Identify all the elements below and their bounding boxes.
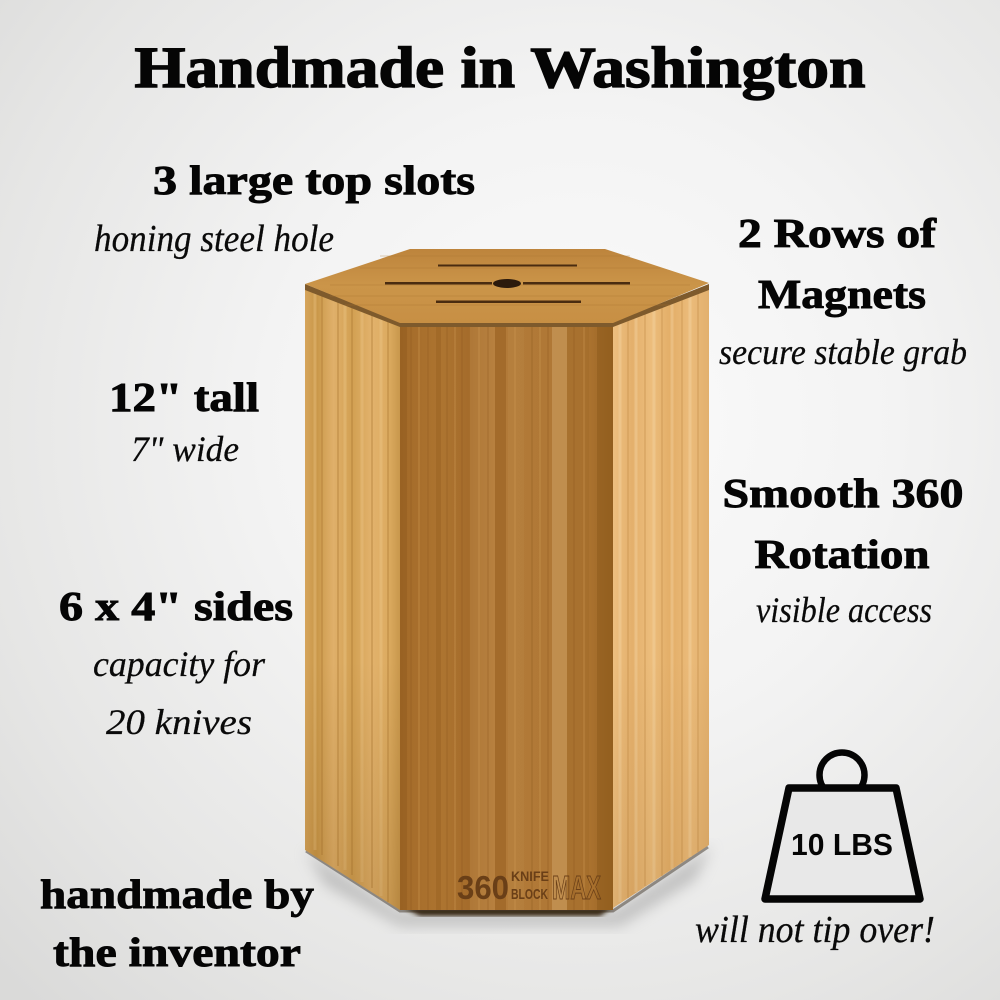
- engraved logo: [457, 868, 601, 906]
- feature: handmade by the inventor: [40, 871, 315, 975]
- feature: handmade by the inventor: handmade by: [40, 871, 315, 917]
- engraved logo: 360: [457, 869, 509, 906]
- feature: rotation: visible access: [756, 590, 932, 630]
- feature: magnets: Magnets: [758, 271, 926, 317]
- center face: [400, 326, 613, 910]
- feature: sides and capacity: 20 knives: [106, 702, 252, 742]
- engraved logo: MAX: [552, 869, 601, 906]
- feature: height and width: [109, 374, 259, 469]
- feature: rotation: Smooth 360: [722, 470, 964, 516]
- feature: height and width: 12" tall: [109, 374, 259, 420]
- feature: handmade by the inventor: the inventor: [53, 929, 301, 975]
- feature: sides and capacity: capacity for: [93, 644, 266, 684]
- icon: 10 lbs weight: 10 LBS: [791, 827, 893, 862]
- slots and honing hole: [385, 264, 630, 303]
- top panel edge: [305, 284, 709, 327]
- icon: 10 lbs weight: [765, 752, 920, 899]
- dark base shadow: [404, 908, 612, 916]
- feature: rotation: [722, 470, 964, 630]
- feature: magnets: [719, 210, 967, 372]
- feature: top slots: honing steel hole: [94, 218, 334, 260]
- feature: top slots: 3 large top slots: [153, 157, 475, 203]
- feature: sides and capacity: [59, 583, 293, 742]
- feature: sides and capacity: 6 x 4" sides: [59, 583, 293, 629]
- product: bamboo knife block: [305, 249, 712, 926]
- title: Handmade in Washington: [134, 35, 866, 100]
- feature: magnets: secure stable grab: [719, 332, 967, 372]
- block shadow: [305, 846, 712, 926]
- left face: [305, 288, 400, 910]
- caption: will not tip over: will not tip over!: [695, 909, 935, 951]
- contact shadow: [306, 847, 708, 911]
- feature: rotation: Rotation: [754, 531, 930, 577]
- engraved logo: KNIFE: [511, 868, 549, 884]
- top panel: [305, 249, 709, 323]
- feature: top slots: [94, 157, 475, 260]
- feature: magnets: 2 Rows of: [738, 210, 938, 256]
- feature: height and width: 7" wide: [131, 429, 239, 469]
- engraved logo: BLOCK: [511, 886, 548, 903]
- right face: [613, 288, 709, 908]
